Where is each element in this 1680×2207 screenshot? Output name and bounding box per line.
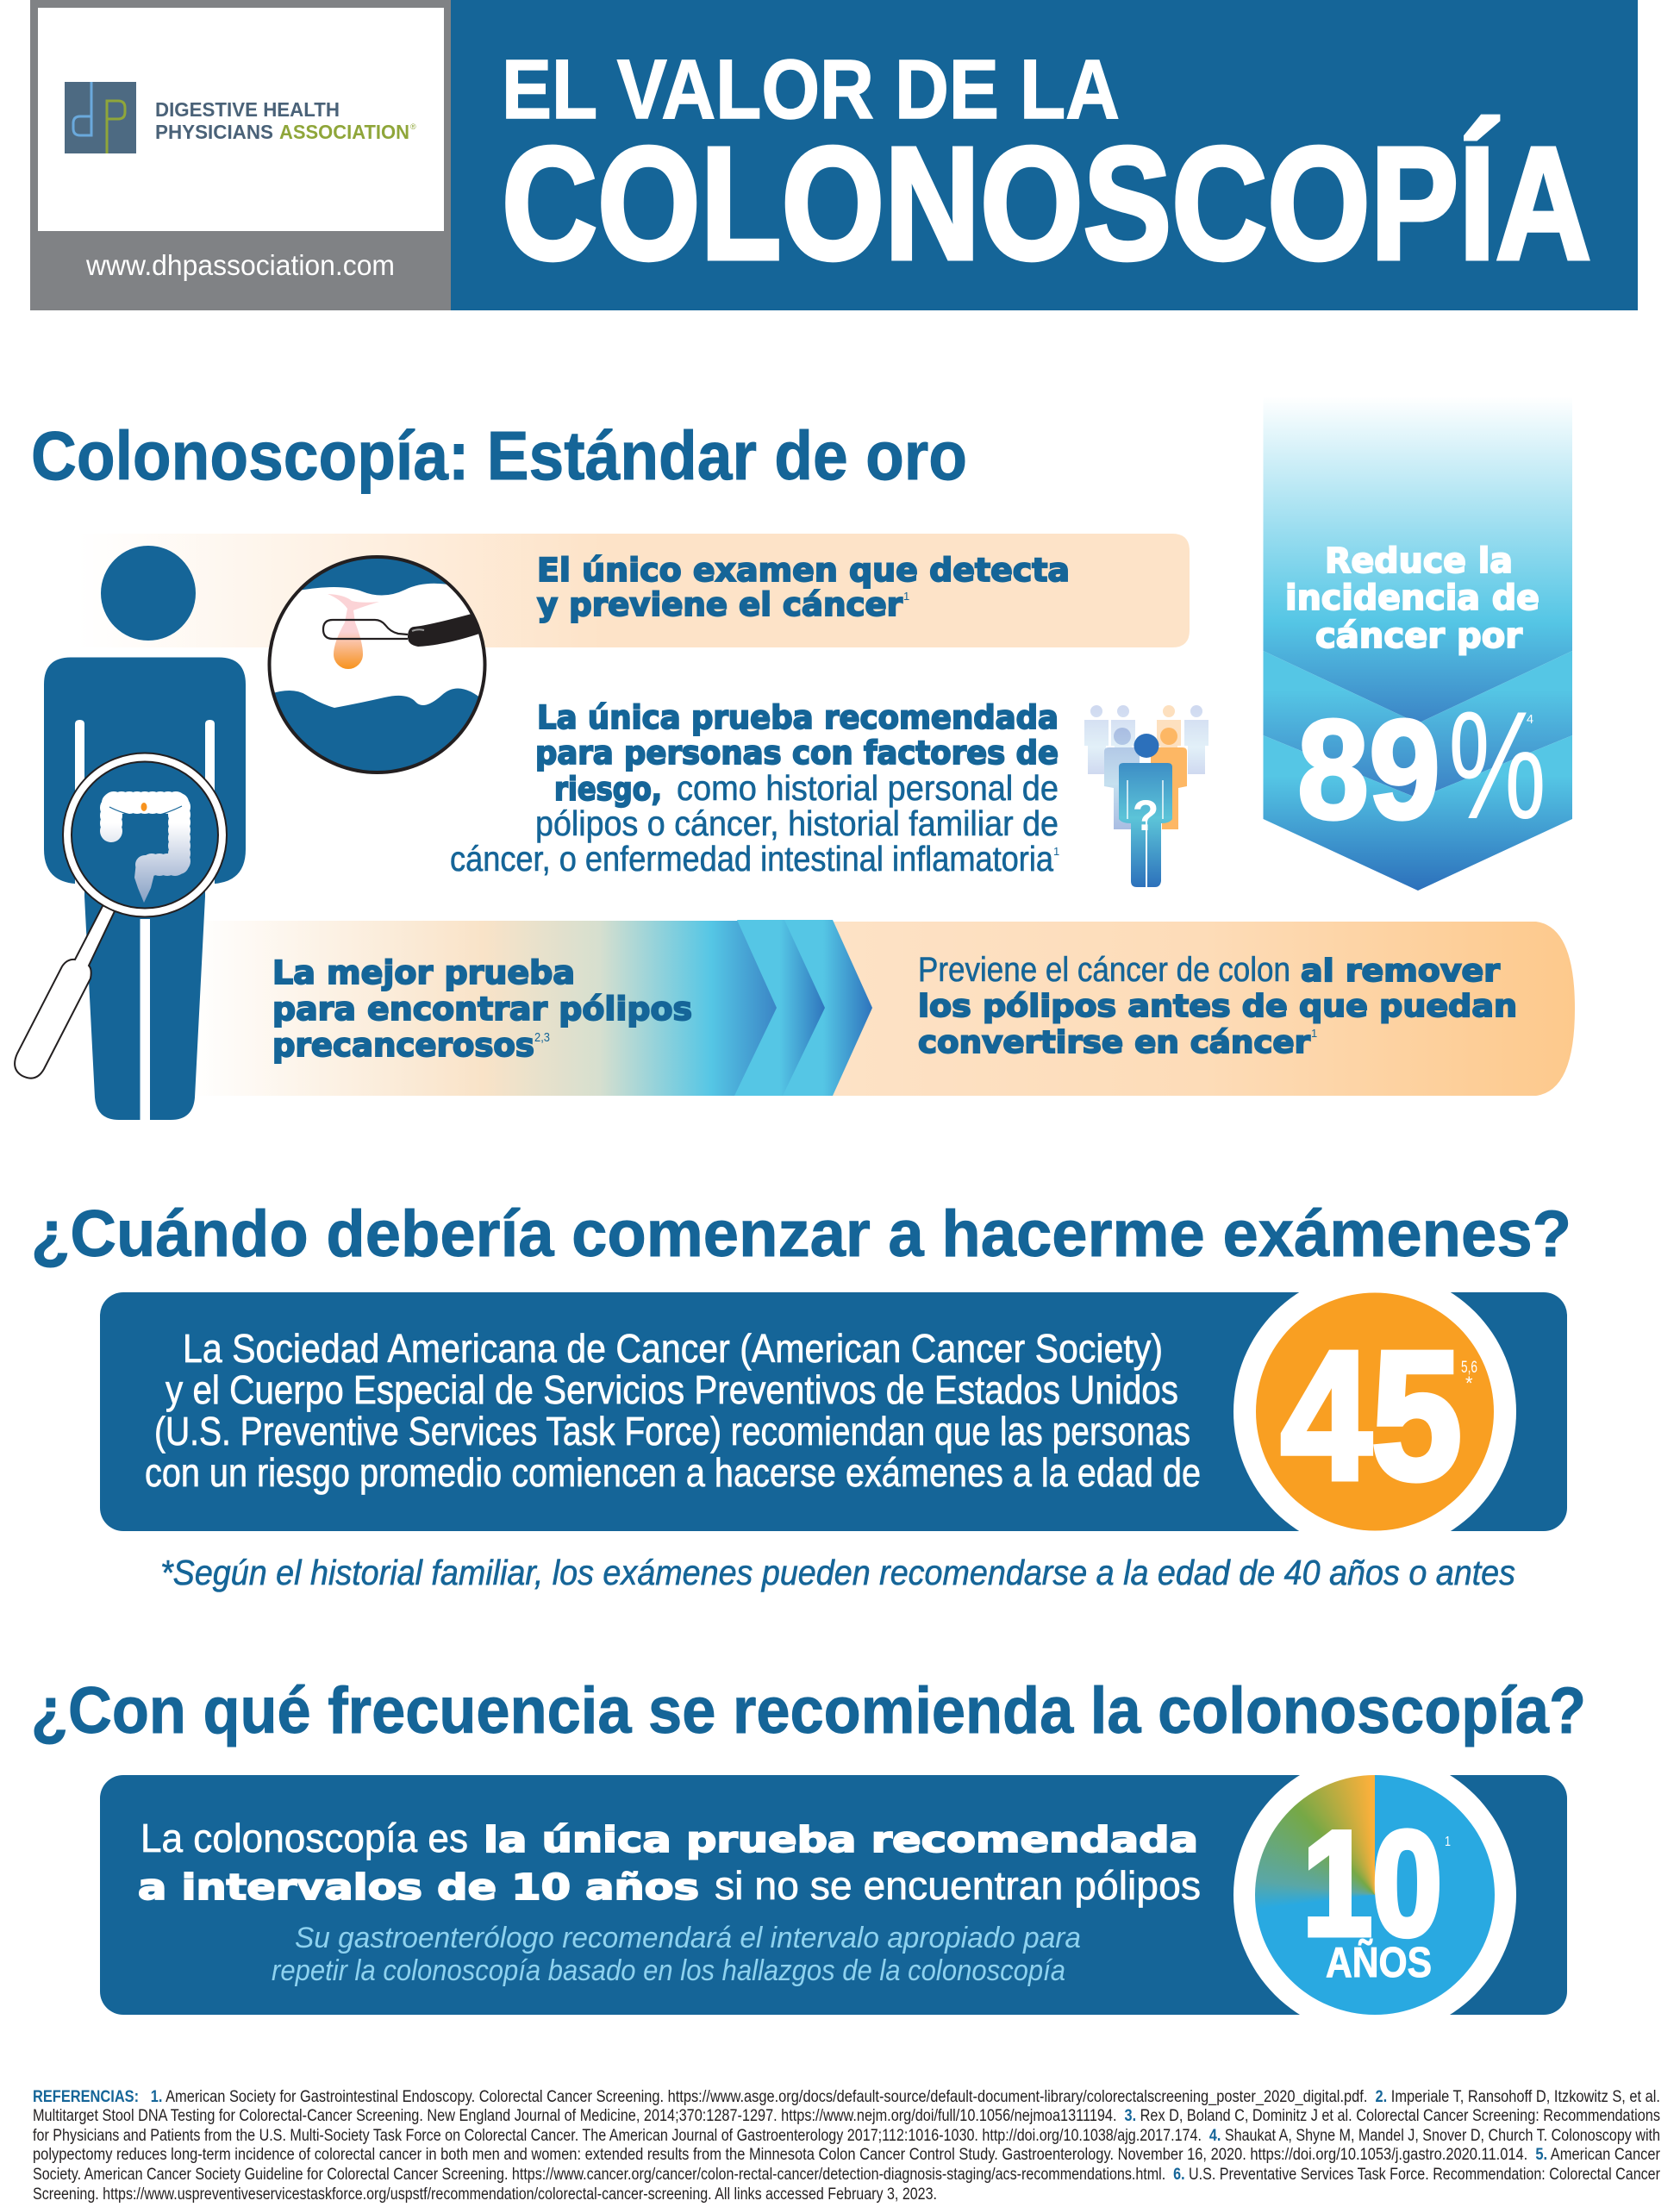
text: mejor prueba: La mejor prueba (272, 954, 575, 991)
text: unico examen: y previene el cáncer (537, 586, 903, 623)
header: logo panel (30, 0, 451, 310)
text: reduce la incidencia: cáncer por (1315, 616, 1522, 656)
text: reduce la incidencia: Reduce la (1325, 541, 1513, 581)
text: recommendation: La Sociedad Americana de Cancer (American Cancer Society) (183, 1326, 1163, 1371)
text: unica prueba recomendada: pólipos o cáncer, historial familiar de (535, 803, 1059, 843)
text: unica prueba recomendada: La única prueba recomendada (537, 699, 1059, 736)
text: mejor prueba (272, 954, 692, 1064)
text: mejor prueba: 2,3 (534, 1030, 550, 1045)
heading: frecuencia: ¿Con qué frecuencia se recomienda la colonoscopía? (31, 1674, 1586, 1747)
text: reduce la incidencia: incidencia de (1285, 578, 1539, 618)
logo text: ® (410, 122, 416, 131)
logo text: DIGESTIVE HEALTH (155, 98, 340, 121)
text: mejor prueba: para encontrar pólipos (272, 991, 692, 1028)
text: reduce la incidencia (1285, 541, 1539, 656)
number: 89%: 4 (1527, 712, 1533, 727)
text: unico examen (537, 552, 1070, 623)
references: REFERENCIAS: 1. American Society for Gastrointestinal Endoscopy. Colorectal Cancer Screening. https://www.asge.org/docs/default-source/default-document-library/colorectalscreening_poster_2020_digital.pdf. 2. Imperiale T, Ransohoff D, Itzkowitz S, et al. (33, 2088, 1660, 2106)
references: Screening. https://www.uspreventiveservicestaskforce.org/uspstf/recommendation/colorectal-cancer-screening. All links accessed February 3, 2023. (33, 2185, 937, 2204)
ribbon: 89 percent (1264, 397, 1572, 891)
icon: colon (109, 803, 182, 903)
header: title panel (451, 0, 1638, 310)
logo text: PHYSICIANS (155, 121, 273, 143)
text: gastroenterologist note: Su gastroenterólogo recomendará el intervalo apropiado para (295, 1922, 1081, 1954)
text: previene el cancer: Previene el cáncer de colon (918, 951, 1290, 989)
website url: www.dhpassociation.com (85, 249, 395, 281)
text: recommendation: (U.S. Preventive Services Task Force) recomiendan que las personas (154, 1409, 1190, 1454)
heading: estándar de oro: Colonoscopía: Estándar de oro (31, 417, 967, 494)
title line 1: EL VALOR DE LA (502, 42, 1120, 136)
panel: age recommendation (100, 1271, 1567, 1566)
badge: age 45: * (1465, 1372, 1473, 1394)
icon: people group (1084, 705, 1208, 887)
text: previene el cancer: 1 (1311, 1027, 1317, 1040)
icon: human figure (44, 546, 246, 1120)
badge: age 45 (1233, 1271, 1517, 1566)
panel: interval recommendation (100, 1754, 1567, 2041)
text: interval: si no se encuentran pólipos (715, 1863, 1201, 1908)
text: recommendation (145, 1326, 1201, 1495)
text: unica prueba recomendada: como historial personal de (677, 768, 1059, 808)
text: unica prueba recomendada: riesgo, (554, 771, 662, 808)
text: previene el cancer: los pólipos antes de que puedan (918, 989, 1517, 1024)
text: interval (138, 1816, 1201, 1908)
panel: polyp to remove bar (190, 920, 1575, 1096)
heading: cuando: ¿Cuándo debería comenzar a hacerme exámenes? (31, 1197, 1571, 1271)
text: unico examen: El único examen que detecta (537, 552, 1070, 589)
icon: dhp logo mark (65, 82, 136, 153)
icon: polyp and snare circle (267, 552, 487, 785)
badge: 10 years: 10 (1302, 1801, 1442, 1966)
text: mejor prueba: precancerosos (272, 1027, 534, 1064)
text: previene el cancer (918, 951, 1517, 1060)
text: interval: a intervalos de 10 años (138, 1866, 699, 1908)
badge: age 45: 45 (1281, 1313, 1462, 1517)
text: interval: La colonoscopía es (141, 1816, 468, 1860)
badge: 10 years (1233, 1754, 1517, 2041)
text: gastroenterologist note (272, 1922, 1081, 1987)
text: previene el cancer: convertirse en cáncer (918, 1025, 1310, 1060)
icon: magnifying glass with colon (15, 753, 227, 1078)
text: unica prueba recomendada: para personas con factores de (535, 735, 1059, 772)
text: unica prueba recomendada: 1 (1053, 845, 1059, 858)
number: 89% (1297, 679, 1546, 851)
number: 89%: % (1448, 679, 1546, 851)
text: unica prueba recomendada: cáncer, o enfermedad intestinal inflamatoria (450, 839, 1053, 878)
badge: 10 years: AÑOS (1326, 1940, 1432, 1986)
text: previene el cancer: al remover (1301, 953, 1500, 989)
badge: age 45: 5,6 (1461, 1359, 1477, 1377)
text: unico examen: 1 (903, 590, 909, 603)
panel: peach banner (52, 534, 1190, 647)
number: 89%: 89 (1297, 691, 1440, 848)
badge: 10 years: 1 (1445, 1835, 1451, 1849)
logo text (155, 98, 416, 143)
text: unica prueba recomendada (450, 699, 1059, 878)
logo text: ASSOCIATION (279, 121, 409, 143)
text: recommendation: con un riesgo promedio comiencen a hacerse exámenes a la edad de (145, 1450, 1201, 1495)
icon: people group: ? (1133, 791, 1159, 840)
references (33, 2088, 1661, 2204)
text: gastroenterologist note: repetir la colonoscopía basado en los hallazgos de la colonoscopía (272, 1954, 1065, 1987)
footnote: family history: *Según el historial familiar, los exámenes pueden recomendarse a la edad de 40 años o antes (160, 1553, 1515, 1592)
text: interval: la única prueba recomendada (484, 1819, 1198, 1860)
text: recommendation: y el Cuerpo Especial de Servicios Preventivos de Estados Unidos (166, 1367, 1178, 1412)
